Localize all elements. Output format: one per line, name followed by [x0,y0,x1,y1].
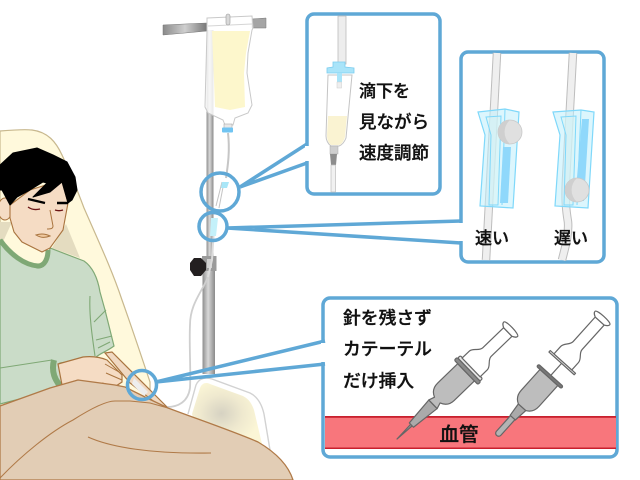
panel: catheter insertion [156,298,617,457]
forearm [105,352,167,407]
stand base with seat [188,378,270,450]
syringe: catheter only [484,305,617,447]
label: catheter note: 針を残さず [343,307,432,328]
label: drip rate [359,82,429,163]
drip stand pole [163,18,266,374]
sweater collar [0,240,48,266]
sleeve folds [0,296,112,368]
patient [0,148,167,407]
face [10,180,68,252]
label: catheter note: カテーテル [343,339,432,359]
eyebrows [28,199,68,203]
clamp: slow [553,53,594,260]
label: drip rate: 滴下を [359,82,410,101]
label: drip rate: 見ながら [359,112,429,132]
hand [58,357,122,388]
insertion site [132,378,148,396]
label: drip rate: 速度調節 [359,143,429,163]
callout pointer [240,144,307,187]
label: blood vessel: 血管 [440,424,479,446]
zoom circle: clamp [199,212,227,240]
drip chamber illustration [326,16,354,192]
blood vessel [325,416,616,449]
panel: drip chamber [240,14,440,194]
blanket [0,380,293,480]
sleeve cuff [53,360,61,387]
label: catheter note [343,307,432,391]
nose and mouth [47,210,53,229]
zoom circle: drip chamber [201,173,239,211]
callout pointer [156,341,325,382]
infusion tube [167,133,229,407]
sweater [0,240,114,404]
ear [0,198,12,220]
syringe: with needle [385,315,524,451]
panel: clamp speeds [227,52,604,262]
chair back [0,130,150,420]
stand knob [190,258,206,276]
zoom circle: insertion site [128,370,156,400]
closed eyes [28,207,63,211]
clamp: fast [478,53,522,260]
label: fast: 速い [475,229,509,248]
label: slow: 遅い [554,229,588,248]
infusion bag [205,14,253,132]
label: catheter note: だけ挿入 [343,371,414,391]
hair [0,148,77,205]
callout pointer [227,221,461,243]
